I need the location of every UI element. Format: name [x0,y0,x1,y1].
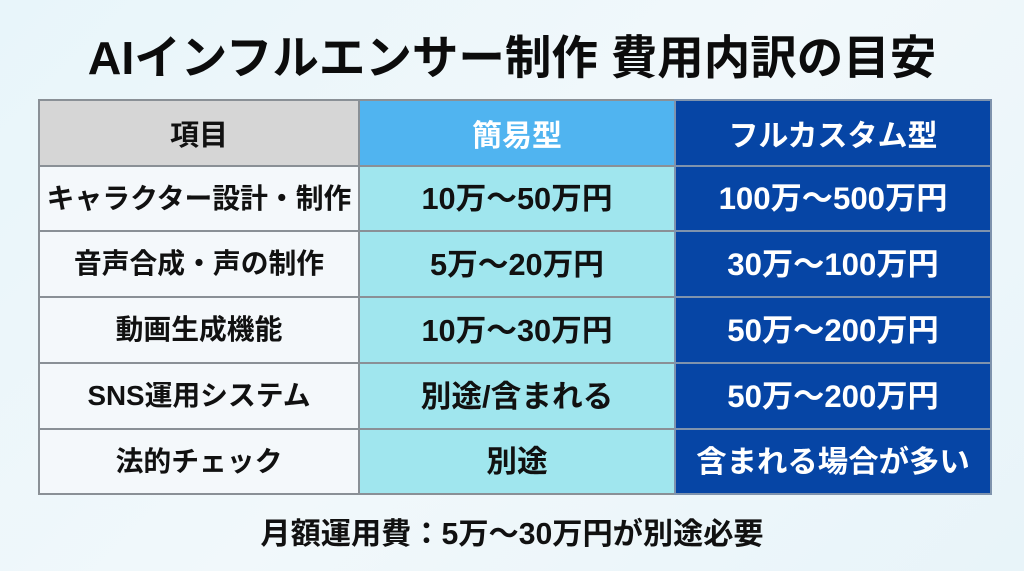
full custom cost: voice synthesis [674,230,992,298]
title: AIインフルエンサー制作 費用内訳の目安 [88,32,936,84]
simple cost: legal check: 別途 [486,444,548,479]
panel: cost table [38,99,992,495]
full custom cost: legal check [674,428,992,495]
header: full custom type [674,99,992,167]
full custom cost: voice synthesis: 30万～100万円 [727,246,939,282]
simple cost: video generation: 10万～30万円 [421,312,613,348]
footnote: monthly operating cost: 月額運用費：5万～30万円が別途必要 [260,518,764,551]
simple cost: voice synthesis: 5万～20万円 [430,246,604,282]
header: item [38,99,360,167]
full custom cost: legal check: 含まれる場合が多い [696,444,970,478]
simple cost: legal check [358,428,676,495]
simple cost: voice synthesis [358,230,676,298]
row label: video generation: 動画生成機能 [116,314,282,345]
simple cost: character design: 10万～50万円 [421,181,613,216]
row label: SNS operation [38,362,360,430]
row label: SNS operation: SNS運用システム [87,380,311,411]
header: item: 項目 [170,120,228,152]
full custom cost: SNS operation: 50万～200万円 [727,378,939,414]
row label: character design [38,165,360,232]
full custom cost: SNS operation [674,362,992,430]
row label: voice synthesis [38,230,360,298]
row label: legal check: 法的チェック [116,446,282,476]
simple cost: SNS operation [358,362,676,430]
row label: voice synthesis: 音声合成・声の制作 [74,248,324,279]
header: simple type [358,99,676,167]
simple cost: SNS operation: 別途/含まれる [421,378,613,414]
row label: video generation [38,296,360,364]
full custom cost: video generation [674,296,992,364]
full custom cost: character design: 100万～500万円 [719,181,947,216]
row label: character design: キャラクター設計・制作 [47,182,351,214]
full custom cost: character design [674,165,992,232]
header: simple type: 簡易型 [472,120,562,152]
full custom cost: video generation: 50万～200万円 [727,312,939,348]
row label: legal check [38,428,360,495]
header: full custom type: フルカスタム型 [728,120,938,152]
simple cost: character design [358,165,676,232]
simple cost: video generation [358,296,676,364]
